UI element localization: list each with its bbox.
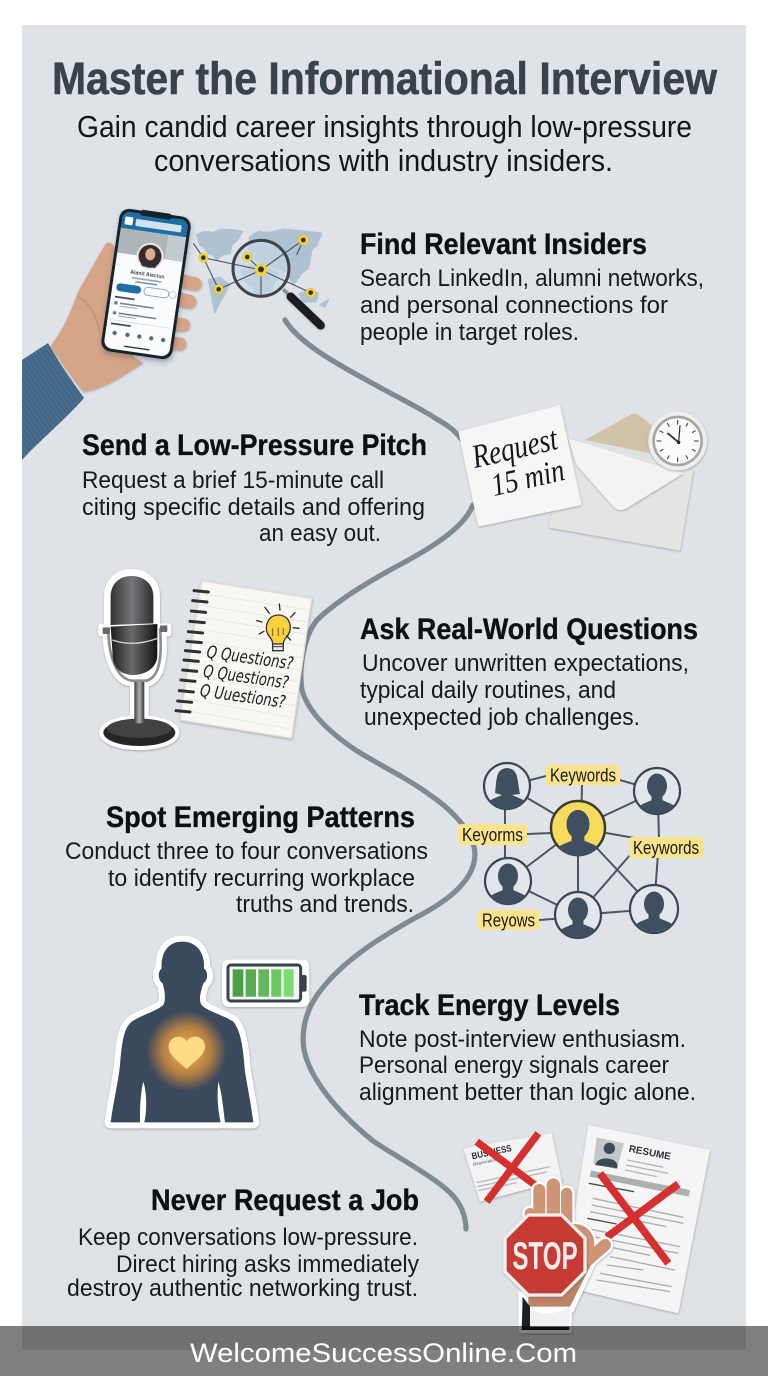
step 1 text: Find Relevant Insiders: and personal connections for [360,292,668,319]
keyword labels: Keyorms [462,824,523,845]
sticky note: Request 15 min: Request [468,420,562,476]
step 6 text: Never Request a Job: destroy authentic networking trust. [67,1275,418,1302]
illustration: notebook with questions and lightbulb [176,581,312,738]
mic stem [134,680,144,723]
person silhouette: woman [490,768,524,809]
keyword labels [458,764,703,930]
central person [549,801,607,859]
handwritten questions: Q Uuestions? [199,681,287,713]
step 6 text: Never Request a Job [67,1184,419,1302]
step 3 text: Ask Real-World Questions: Ask Real-World Questions [360,613,698,646]
hand outline [518,1185,605,1333]
footer band: WelcomeSuccessOnline.Com [190,1338,577,1368]
illustration: crossed-out business card [463,1133,562,1202]
step 4 text: Spot Emerging Patterns [65,801,428,918]
illustration: crossed-out resume: RESUME [628,1144,672,1163]
step 6 text: Never Request a Job: Never Request a Job [151,1184,419,1217]
icon: world map with magnifier [193,229,328,325]
step 1 text: Find Relevant Insiders: people in target roles. [360,319,579,346]
handwritten questions: Q Questions? [205,642,295,674]
stop sign [503,1213,587,1297]
person silhouettes [483,774,682,940]
mic white outline [101,575,175,746]
stop sign: STOP [512,1234,578,1278]
connecting path [285,320,475,1229]
step 5 text: Track Energy Levels: Track Energy Levels [359,989,620,1022]
hand [50,242,195,392]
keyword labels: Keywords [633,837,699,858]
person nodes [484,763,680,938]
step 4 text: Spot Emerging Patterns: Spot Emerging Patterns [106,801,415,834]
spiral binding [176,591,208,712]
step 2 text: Send a Low-Pressure Pitch [82,429,427,547]
subtitle: Gain candid career insights through low-pressure [77,109,692,144]
handwritten questions [199,642,295,713]
phone [100,207,192,360]
phone: Alanit Aiactus [130,270,165,281]
mic cradle [108,628,161,681]
red cross [477,1133,538,1202]
title: Master the Informational Interview [52,53,718,104]
sticky note: Request 15 min [458,405,582,527]
step 4 text: Spot Emerging Patterns: to identify recurring workplace [108,865,415,892]
network diagram with keywords [458,763,703,940]
step 6 text: Never Request a Job: Direct hiring asks immediately [116,1251,419,1278]
illustration: crossed-out business card: BUSINESS [471,1143,513,1161]
suit sleeve [522,1297,569,1330]
sleeve [22,343,84,460]
illustration: stop hand [503,1185,605,1333]
step 1 text: Find Relevant Insiders: Find Relevant Insiders [360,228,647,261]
lightbulb [257,604,299,651]
step 2 text: Send a Low-Pressure Pitch: an easy out. [259,520,381,547]
illustration: body silhouette with glowing heart [111,942,253,1122]
notebook page [180,581,312,738]
subtitle [77,109,692,178]
heart [169,1037,205,1069]
keyword labels: Keywords [550,764,616,786]
illustration: crossed-out resume [563,1125,710,1313]
step 4 text: Spot Emerging Patterns: Conduct three to four conversations [65,838,428,865]
step 3 text: Ask Real-World Questions [360,613,698,731]
clock [648,412,707,470]
step 5 text: Track Energy Levels: Note post-interview enthusiasm. [359,1026,686,1053]
step 3 text: Ask Real-World Questions: Uncover unwritten expectations, [362,650,689,677]
hand [530,1185,605,1270]
illustration: crossed-out business card: Reservations [472,1156,501,1167]
step 2 text: Send a Low-Pressure Pitch: Send a Low-Pressure Pitch [82,429,427,462]
step 1 text: Find Relevant Insiders: Search LinkedIn, alumni networks, [360,265,704,292]
sticky note: Request 15 min: 15 min [488,451,568,503]
keyword labels: Reyows [482,910,535,930]
step 3 text: Ask Real-World Questions: typical daily routines, and [360,677,616,704]
subtitle: conversations with industry insiders. [154,143,613,178]
step 5 text: Track Energy Levels: Personal energy signals career [359,1052,669,1079]
icon: full battery [222,960,309,1007]
step 1 text: Find Relevant Insiders [360,228,704,346]
envelope [548,414,693,551]
handwritten questions: Q Questions? [202,662,290,694]
illustration: envelope, clock and sticky note [458,405,707,551]
mic body [111,624,157,675]
illustration: microphone [101,575,175,746]
footer band [0,1326,768,1376]
network lines [505,776,703,920]
step 5 text: Track Energy Levels [359,989,696,1106]
mic base [103,719,175,746]
mic head [111,576,153,625]
step 2 text: Send a Low-Pressure Pitch: citing specific details and offering [82,494,425,521]
red cross [600,1173,678,1263]
step 6 text: Never Request a Job: Keep conversations low-pressure. [78,1224,418,1251]
step 4 text: Spot Emerging Patterns: truths and trends. [236,891,414,918]
step 3 text: Ask Real-World Questions: unexpected job challenges. [364,704,640,731]
world map [197,229,328,313]
illustration: hand holding phone with profile [22,207,195,460]
step 5 text: Track Energy Levels: alignment better than logic alone. [359,1079,696,1106]
step 2 text: Send a Low-Pressure Pitch: Request a brief 15-minute call [82,467,384,494]
